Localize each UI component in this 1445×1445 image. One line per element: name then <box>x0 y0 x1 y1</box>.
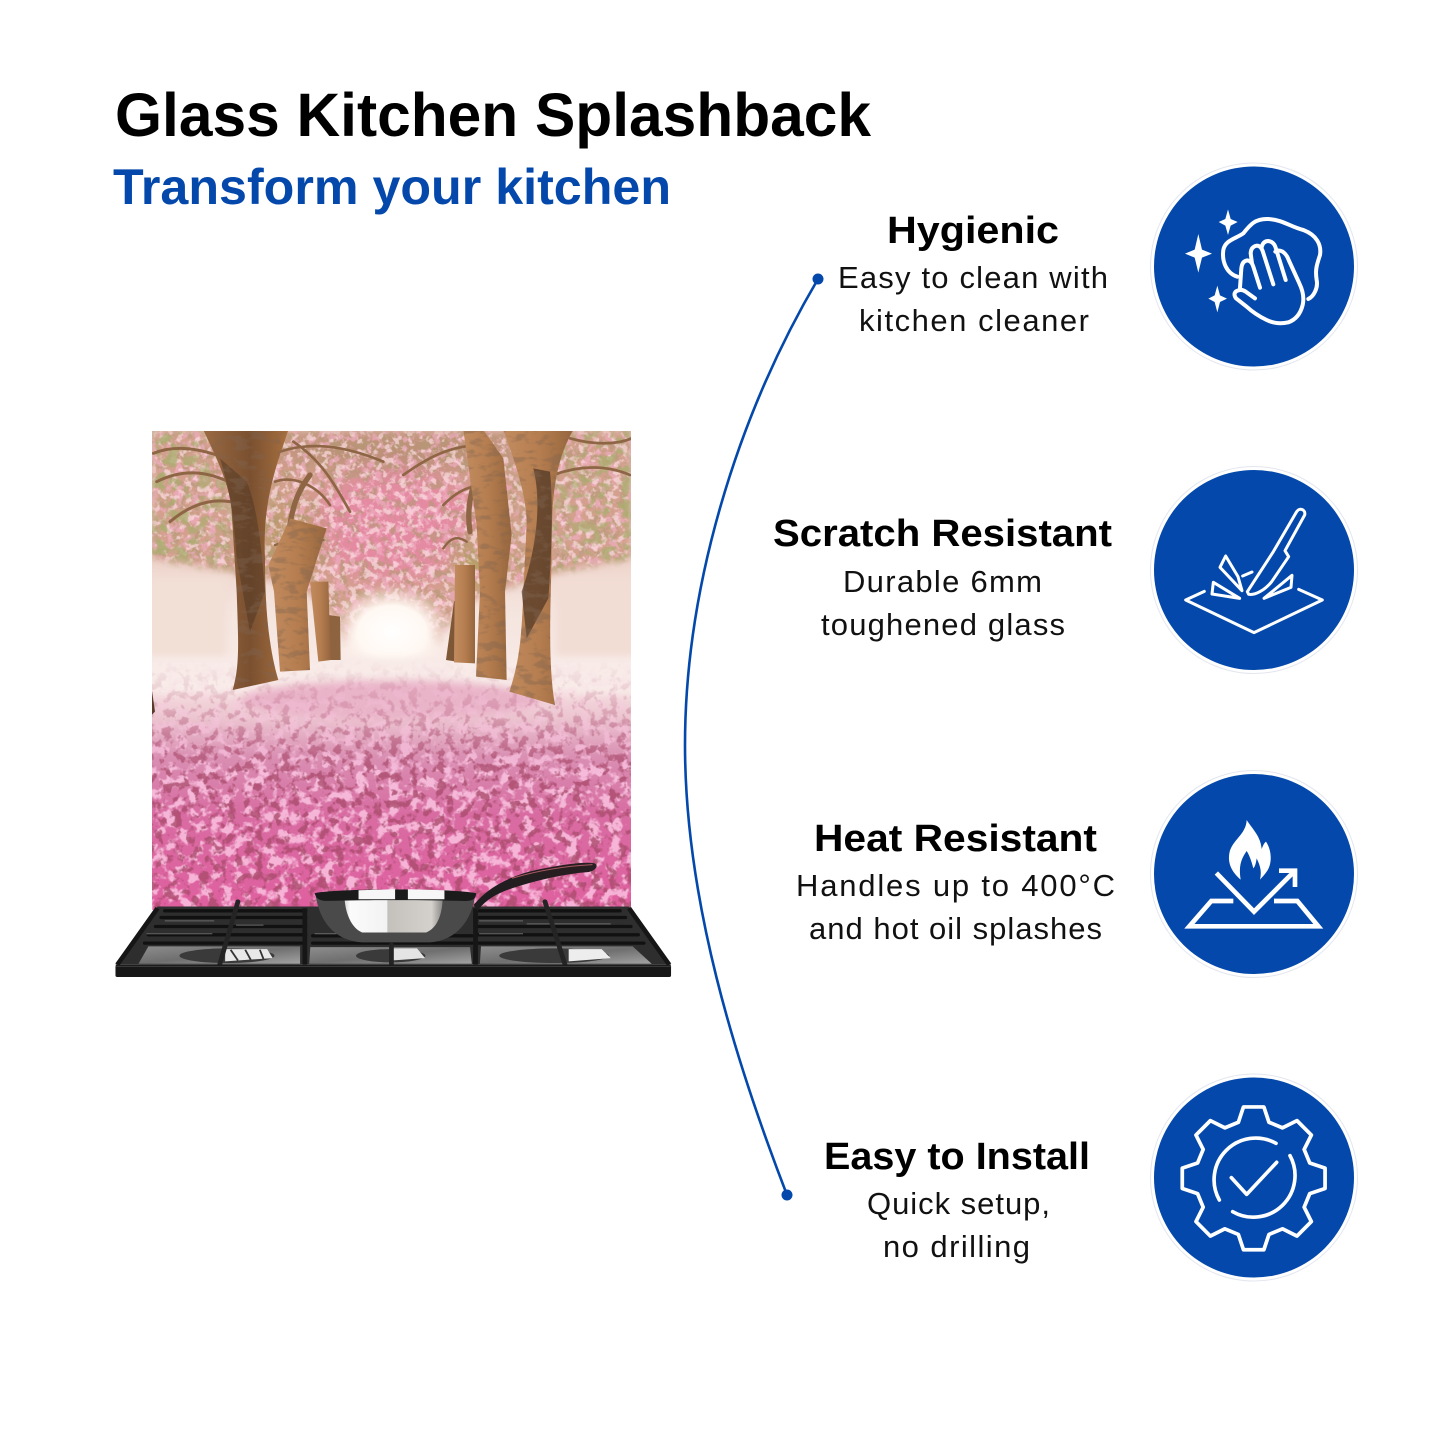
frying pan <box>315 863 597 942</box>
feature text: heat resistant: Heat Resistant <box>814 818 1097 860</box>
canopy colour masses <box>152 431 631 645</box>
feature text: scratch resistant: Scratch Resistant <box>773 513 1112 555</box>
pan body <box>315 894 476 942</box>
hob deck <box>115 907 671 965</box>
product image: splashback on gas hob <box>115 430 671 977</box>
feature text: easy to install: Easy to Install <box>824 1136 1090 1178</box>
feature text: heat resistant <box>796 818 1115 946</box>
flower carpet <box>152 660 631 910</box>
feature text: hygienic <box>838 210 1108 338</box>
photo: cherry blossom avenue <box>140 430 640 910</box>
icon: knife scratching glass <box>1150 466 1358 674</box>
feature text: heat resistant: and hot oil splashes <box>809 911 1102 946</box>
feature text: easy to install: no drilling <box>883 1229 1030 1264</box>
feature text: easy to install: Quick setup, <box>867 1186 1050 1221</box>
feature text: hygienic: kitchen cleaner <box>859 303 1089 338</box>
burner plates <box>139 946 300 964</box>
grates <box>145 911 644 943</box>
title: Glass Kitchen Splashback <box>115 81 871 149</box>
connector curve <box>685 274 824 1200</box>
tree trunks and branches <box>152 430 632 715</box>
feature text: heat resistant: Handles up to 400°C <box>796 868 1115 903</box>
bark texture <box>211 431 568 705</box>
burners <box>179 948 611 963</box>
pale ground <box>152 678 631 720</box>
pan rim <box>315 889 476 901</box>
front edge <box>115 965 671 977</box>
icon: hand wiping with cloth <box>1150 163 1358 370</box>
feature text: hygienic: Hygienic <box>887 210 1059 252</box>
light at the end of the avenue <box>336 586 450 658</box>
feature text: scratch resistant: toughened glass <box>821 607 1065 642</box>
icon: gear with check mark <box>1150 1074 1358 1281</box>
feature text: scratch resistant <box>773 513 1112 642</box>
misty background sides <box>152 605 631 656</box>
pan handle <box>474 863 597 912</box>
feature text: scratch resistant: Durable 6mm <box>843 564 1042 599</box>
feature text: easy to install <box>824 1136 1090 1264</box>
feature text: hygienic: Easy to clean with <box>838 260 1108 295</box>
gas hob <box>115 863 671 977</box>
subtitle: Transform your kitchen <box>113 159 671 215</box>
icon: flame and heat resistance <box>1150 770 1358 978</box>
